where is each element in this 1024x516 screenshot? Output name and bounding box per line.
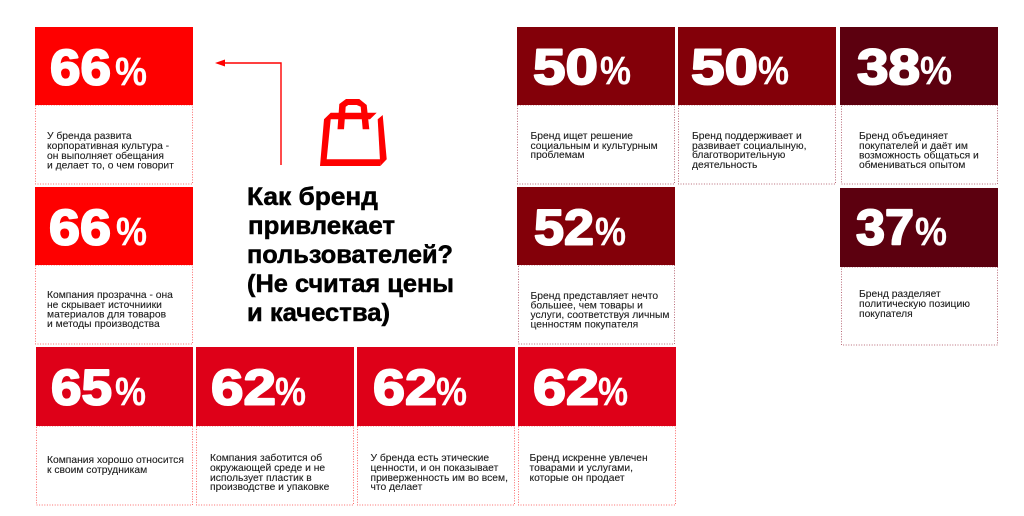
panel: 50% social problems: Бренд ищет решение [530, 131, 633, 142]
panel: 50% social problems: проблемам [530, 149, 585, 161]
panel: 37% politics: покупателя [859, 309, 913, 320]
panel: 62% environment: Компания заботится об [210, 452, 322, 464]
panel: 62% passion [518, 347, 676, 505]
panel: 62% passion: 62 [533, 360, 599, 416]
panel: 37% politics: Бренд разделяет [859, 289, 941, 300]
panel: 66% transparency: 66 [49, 200, 111, 256]
panel: 66% corporate culture: и делает то, о чем говорит [47, 160, 174, 172]
panel: 38% community: Бренд объединяет [859, 130, 948, 142]
panel: 66% corporate culture: У бренда развита [47, 130, 132, 142]
panel: 50% charity: % [758, 49, 789, 93]
panel: 50% charity: Бренд поддерживает и [692, 131, 802, 142]
panel: 50% charity: 50 [691, 39, 758, 95]
panel: 50% charity [678, 27, 836, 184]
panel: 62% ethics: ценности, и он показывает [370, 463, 499, 474]
panel: 38% community: 38 [857, 39, 920, 95]
title: и качества) [247, 299, 390, 327]
panel: 66% transparency: Компания прозрачна - она [47, 290, 173, 301]
panel: 37% politics [840, 188, 998, 345]
panel: 37% politics: % [915, 210, 947, 254]
panel: 50% social problems [517, 27, 675, 184]
panel: 62% environment: окружающей среде и не [210, 463, 325, 474]
panel: 66% transparency: не скрывает источниики [47, 300, 162, 311]
title: пользователей? [247, 241, 453, 269]
panel: 62% ethics: приверженность им во всем, [370, 473, 508, 484]
panel: 52% values: большее, чем товары и [530, 300, 643, 312]
panel: 66% corporate culture: 66 [50, 40, 111, 96]
title [247, 183, 454, 327]
panel: 65% employees: 65 [51, 360, 112, 416]
panel: 38% community: возможность общаться и [859, 150, 979, 162]
panel: 62% ethics: что делает [370, 482, 423, 493]
panel: 50% social problems: социальным и культурным [530, 141, 658, 152]
panel: 66% corporate culture: % [115, 50, 147, 94]
panel: 62% environment [196, 347, 354, 505]
panel: 52% values [517, 187, 675, 344]
panel: 62% environment: 62 [211, 360, 276, 416]
panel: 62% environment: % [275, 370, 306, 414]
panel: 62% environment: использует пластик в [210, 473, 312, 484]
icon: shopping bag [320, 99, 387, 166]
panel: 62% ethics [357, 347, 515, 505]
panel: 50% social problems: 50 [533, 39, 598, 95]
panel: 50% social problems: % [600, 49, 631, 93]
panel: 66% transparency: и методы производства [47, 319, 160, 330]
arrow [215, 60, 281, 165]
panel: 66% corporate culture [35, 27, 193, 184]
title: Как бренд [247, 183, 378, 211]
panel: 50% charity: развивает социалыную, [692, 141, 807, 152]
panel: 38% community: % [920, 49, 952, 93]
panel: 62% ethics: 62 [373, 360, 437, 416]
panel: 38% community: обмениваться опытом [859, 159, 965, 171]
panel: 52% values: 52 [534, 200, 594, 256]
panel: 37% politics: политическую позицию [859, 299, 970, 310]
panel: 50% charity: деятельность [692, 160, 757, 171]
panel: 66% transparency: материалов для товаров [47, 310, 167, 320]
panel: 37% politics: 37 [856, 200, 914, 256]
panel: 65% employees [36, 347, 193, 505]
panel: 62% ethics: % [436, 370, 467, 414]
panel: 62% passion: товарами и услугами, [530, 463, 633, 474]
panel: 62% passion: которые он продает [530, 473, 625, 484]
panel: 62% environment: производстве и упаковке [210, 482, 330, 493]
title: (Не считая цены [247, 270, 454, 298]
panel: 52% values: услуги, соответствуя личным [530, 310, 669, 321]
panel: 50% charity: благотворительную [692, 149, 786, 161]
panel: 65% employees: к своим сотрудникам [47, 465, 147, 476]
panel: 65% employees: Компания хорошо относится [47, 455, 184, 466]
panel: 66% corporate culture: корпоративная культура - [47, 141, 169, 152]
panel: 38% community: покупателей и даёт им [859, 141, 968, 152]
panel: 66% transparency: % [116, 210, 147, 254]
panel: 62% passion: Бренд искренне увлечен [530, 453, 648, 464]
panel: 52% values: ценностям покупателя [530, 320, 638, 330]
panel: 52% values: Бренд представляет нечто [530, 291, 658, 302]
panel: 65% employees: % [115, 370, 146, 414]
panel: 66% transparency [35, 187, 193, 344]
panel: 38% community [840, 27, 998, 184]
panel: 66% corporate culture: он выполняет обещания [47, 150, 164, 162]
panel: 52% values: % [595, 210, 626, 254]
panel: 62% ethics: У бренда есть этические [370, 452, 489, 464]
title: привлекает [248, 212, 395, 240]
panel: 62% passion: % [598, 370, 628, 414]
